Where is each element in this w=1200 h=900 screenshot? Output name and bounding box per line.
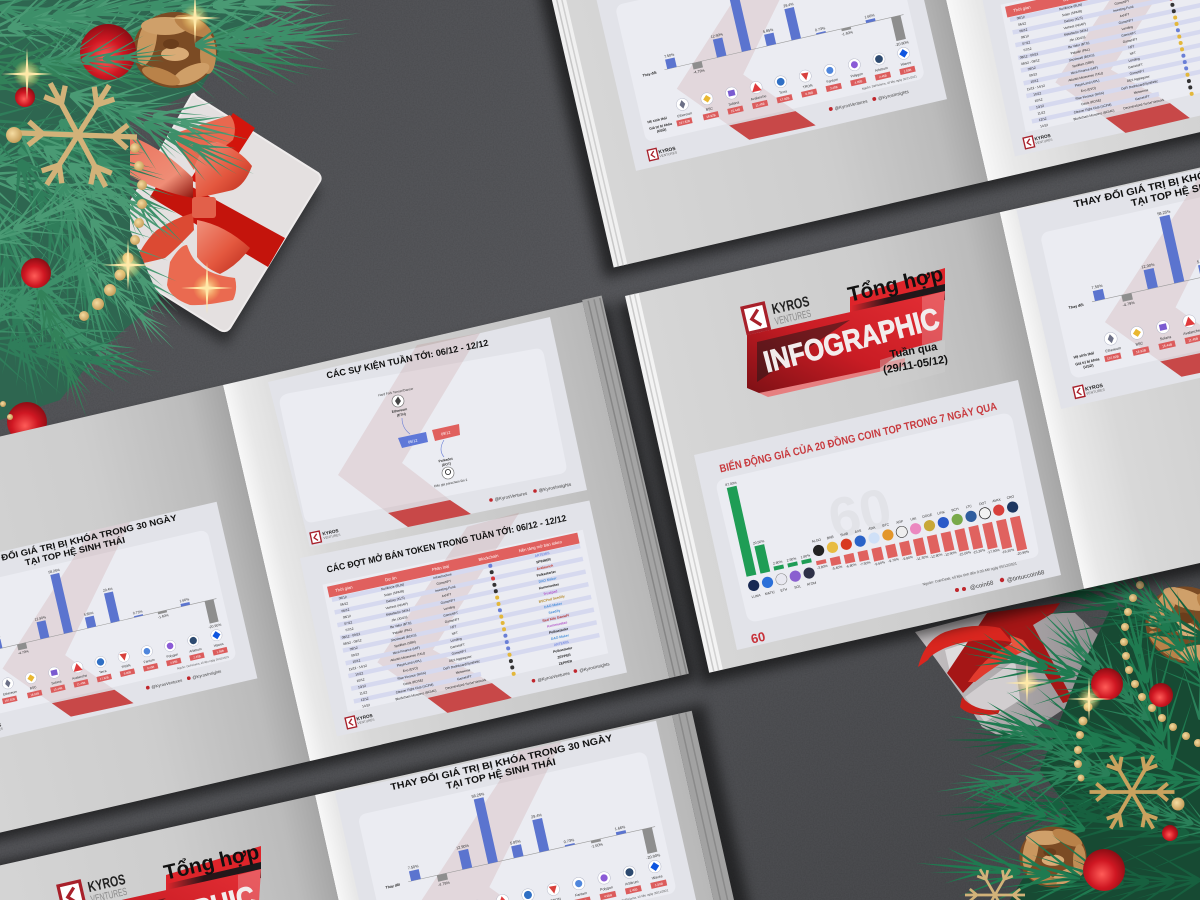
pine branch bottom-right — [912, 523, 1200, 900]
column: dates: 06/12 — [341, 608, 350, 613]
table header: Nền tảng mở bán token — [518, 539, 563, 553]
ecosystem icons — [419, 859, 662, 900]
Kyros logo: KYROS — [770, 294, 811, 318]
gold beads — [1074, 581, 1200, 810]
coin names: MATIC — [764, 590, 776, 596]
footer handles — [531, 661, 611, 684]
coin names: ALGO — [811, 538, 822, 544]
column: categories: Metaverse — [455, 668, 471, 675]
red ribbon decoration — [428, 680, 512, 716]
column: projects: PlayerLand (APL) — [396, 659, 422, 668]
bar values: 12.90% — [456, 844, 470, 850]
bar values: -15.30% — [972, 548, 986, 555]
column: categories: NFT — [451, 631, 458, 636]
bar values: -17.00% — [987, 548, 1000, 555]
gold snowflake — [17, 82, 139, 188]
coin names: UNI — [910, 516, 917, 522]
column: platforms: DAO Maker — [544, 601, 563, 609]
coin icons — [743, 500, 1024, 592]
bar values: 58.25% — [471, 792, 485, 799]
table header: Phân loại — [432, 564, 450, 572]
chart card on bottom book: 1.59B — [654, 882, 663, 887]
red ornaments — [1083, 668, 1178, 891]
column: projects: Rise Finance (RISA) — [397, 671, 426, 681]
column: projects: Galaxy (XLS) — [386, 596, 405, 604]
column: categories: NFT — [450, 624, 457, 630]
event: Ethereum: Ethereum — [391, 407, 408, 414]
column: projects: Solan (SPAIR) — [383, 589, 404, 597]
coin names: SOL — [794, 584, 802, 590]
column: categories: GameNFT — [450, 642, 465, 650]
footer logo: VENTURES — [323, 533, 341, 540]
bar values: -20.90% — [1016, 550, 1029, 556]
bars — [394, 762, 661, 900]
table card — [296, 492, 629, 739]
column: categories: GameNFT — [451, 649, 467, 656]
bar values: -3.80% — [817, 564, 828, 570]
column: platforms: Trustpad — [543, 589, 558, 596]
sparkles — [1005, 661, 1111, 721]
chevron decoration — [338, 333, 480, 513]
bar values: -7.50% — [860, 560, 871, 567]
chart card on bottom book — [335, 721, 699, 900]
column: platforms: ARTEMIS — [553, 640, 570, 647]
bar values: -9.60% — [874, 560, 885, 567]
period caption: Tuần qua — [889, 341, 939, 361]
column: categories: Lending — [443, 605, 455, 611]
period caption — [882, 341, 949, 377]
bar values: -4.79% — [438, 881, 451, 887]
column: categories: Decentralized Social Network — [445, 678, 487, 691]
heading: CÁC SỰ KIỆN TUẦN TỚI: 06/12 - 12/12 — [325, 337, 489, 380]
bar values: -11.30% — [916, 555, 929, 561]
event: Polkadot: (DOT) — [441, 462, 451, 467]
column: categories: DEX Aggregator — [449, 654, 473, 663]
pine branch top-left — [0, 0, 363, 442]
card background — [335, 721, 699, 900]
coin names: ATOM — [806, 581, 817, 587]
column: dates: 14/12 — [362, 703, 371, 709]
panel: price change of top 20 coins — [694, 380, 1061, 650]
table heading: CÁC ĐỢT MỞ BÁN TOKEN TRONG TUẦN TỚI: 06/12 - 12/12 — [325, 512, 567, 575]
gold beads — [0, 127, 147, 420]
coin names: ETH — [780, 587, 788, 593]
book right-centre: cover page with price chart — [615, 124, 1200, 685]
gift box bottom-right — [915, 603, 1117, 743]
footer logo: KYROS — [322, 528, 339, 536]
tag: 09/12 — [432, 424, 460, 441]
panel: upcoming events — [268, 317, 587, 547]
column: projects: Jiin (JGUS) — [391, 615, 408, 622]
column: categories: GameNFT — [457, 674, 472, 681]
gift box top-left — [95, 93, 321, 345]
column: projects: Blockchain Monsters (BCMC) — [395, 689, 437, 701]
column: platforms: DAO Maker — [551, 633, 570, 641]
bar values: -5.40% — [831, 565, 843, 571]
period caption: (29/11-05/12) — [882, 353, 949, 377]
chevron decoration — [394, 742, 600, 900]
column: projects: Paladin (PAL) — [392, 627, 412, 635]
banner title: INFOGRAPHIC — [760, 302, 943, 379]
bar values: 5.85% — [510, 839, 522, 846]
column: dates: 11/12 — [359, 690, 368, 696]
column: dates: 08/12 - 09/12 — [343, 638, 362, 646]
event: Polkadot — [434, 440, 468, 488]
ecosystem names: Polygon — [600, 885, 613, 892]
bar values: 1.80% — [800, 553, 811, 559]
coin names: BNB — [826, 535, 835, 540]
column: projects: Nunifiscie (BUN) — [381, 582, 405, 591]
bar values: 87.00% — [725, 481, 737, 487]
red ornaments — [7, 24, 136, 442]
red ribbon decoration — [388, 500, 471, 527]
bar values: -12.80% — [930, 553, 943, 559]
column: platforms: Avalaunch — [536, 564, 554, 571]
bar values: -6.80% — [845, 563, 857, 569]
header block: logo and banner — [742, 263, 945, 397]
column: dates: 12/12 — [360, 697, 369, 702]
losers bars — [816, 516, 1027, 594]
footer handles: @tintuccoin68 — [1007, 570, 1046, 584]
bar values: 20.50% — [753, 539, 765, 546]
chart title: THAY ĐỔI GIÁ TRỊ BỊ KHÓA TRONG 30 NGÀY — [389, 732, 614, 793]
tag: 09/12: 09/12 — [441, 431, 451, 436]
coin names: ADA — [868, 525, 876, 531]
bar values: -19.20% — [1001, 548, 1015, 554]
coin names: DOT — [979, 501, 987, 506]
column: dates: 10/12 — [352, 658, 361, 664]
footer handles: @KyrosVentures — [537, 670, 571, 683]
ecosystem names: Waves — [651, 874, 663, 880]
Kyros logo — [742, 293, 814, 334]
event: Ethereum — [378, 386, 415, 434]
event: Ethereum: (ETH) — [397, 412, 406, 418]
column: projects: Spellfam (SBR) — [394, 640, 416, 648]
column: categories: GameNFT — [443, 611, 458, 618]
table inner panel — [319, 525, 611, 713]
column: categories: Investing Fund — [435, 585, 456, 593]
column: dates: 10/12 — [356, 677, 365, 683]
coin names: LTC — [965, 504, 973, 509]
column: dates: 09/12 — [351, 652, 360, 658]
sparkles — [1, 0, 233, 314]
column: projects: Vorhest (ADAP) — [385, 602, 408, 610]
column: platforms: Polkastarter — [549, 627, 569, 635]
column: platforms: Red Kite GameFi — [542, 613, 570, 623]
ecosystem names: Fantom — [575, 891, 587, 898]
event: Ethereum: Hard Fork Tencer/Dancer — [378, 386, 415, 397]
footer handles: @KyrosInsights — [579, 661, 611, 673]
bar values: 0.73% — [563, 838, 575, 844]
column: dates: 07/12 — [345, 627, 354, 632]
banner — [747, 268, 945, 397]
chart card on centre-left book — [0, 502, 257, 746]
heading: Tổng hợp — [846, 263, 945, 307]
column: projects: Shoshwell (BCKS) — [390, 633, 417, 642]
column: dates: 11/12 - 14/12 — [348, 664, 368, 672]
column: projects: Bo Valor (BTG) — [390, 621, 412, 629]
column: dates: 06/12 — [343, 614, 351, 620]
column: projects: Metafactor (MSL) — [386, 608, 411, 617]
bar values: -20.90% — [646, 853, 661, 860]
column: dates: 07/12 — [344, 620, 353, 626]
table header: Dự án — [385, 575, 398, 582]
footer logo — [310, 527, 341, 544]
tag: 06/12 — [398, 432, 428, 448]
column: projects: Evo (EVO) — [403, 666, 418, 673]
coin names: CRO — [1006, 494, 1015, 500]
column: categories: GameNFT — [440, 598, 456, 605]
book bottom: cover page and chart page — [0, 704, 792, 900]
column: platforms: Polkastarter — [536, 569, 557, 578]
table header: Thời gian — [335, 584, 354, 593]
panel: token sale table — [296, 492, 629, 739]
bar values: 7.50% — [407, 864, 419, 870]
header on bottom book — [58, 841, 261, 900]
coin names: LINK — [937, 510, 946, 516]
coin names: AXS — [854, 529, 862, 534]
column: categories: GameNFT — [444, 617, 460, 624]
chart card on bottom book: TẠI TOP HỆ SINH THÁI — [445, 756, 557, 792]
panel heading: BIẾN ĐỘNG GIÁ CỦA 20 ĐỒNG COIN TOP TRONG 7 NGÀY QUA — [718, 400, 998, 475]
footer handles: @KyrosInsights — [538, 482, 572, 493]
Kyros logo: VENTURES — [774, 308, 812, 328]
tag: 06/12: 06/12 — [408, 439, 418, 444]
column: projects: Atlantis Metaverse (TAU) — [390, 651, 425, 663]
column: platforms: DAO Maker — [538, 576, 558, 584]
watermark: 60 — [822, 475, 897, 551]
pine cone lower — [1019, 825, 1087, 889]
coin names: BCH — [951, 507, 959, 512]
chart card on bottom book: 2.45B — [629, 887, 638, 893]
inner panel — [357, 751, 677, 900]
token table on top book — [974, 0, 1200, 159]
column: platforms: ARTEMIS — [534, 551, 551, 558]
coin names: AVAX — [992, 497, 1002, 503]
chevron decoration — [352, 513, 555, 707]
footer handles: @coin68 — [970, 580, 995, 592]
bar values: -12.90% — [944, 550, 957, 557]
chart card on bottom book: 4.95B — [604, 893, 612, 899]
column: categories: AxNFT — [441, 592, 452, 598]
footer handles — [955, 570, 1046, 592]
column: dates: 06/12 — [338, 595, 347, 600]
footer logo — [345, 712, 375, 729]
coin names: DOGE — [922, 513, 933, 519]
column: platforms: ZEPPER — [557, 653, 572, 660]
row labels: Thay đổi — [385, 883, 400, 890]
column: dates: 10/12 — [358, 684, 366, 689]
column: blockchain icons — [488, 563, 516, 676]
column: dates: 10/12 — [355, 671, 364, 677]
column: dates: 06/12 — [340, 601, 349, 607]
column: projects: Mirai Finance (MIF) — [392, 646, 420, 655]
column: categories: DeFi Dashboard/Synthetic — [443, 659, 481, 671]
column: projects: Oasis (ROSE) — [403, 678, 423, 686]
bar values: 2.80% — [773, 560, 783, 566]
footer handles: @KyrosVentures — [494, 491, 528, 502]
column: projects: Cleaver Fight Club (SCFM) — [395, 683, 434, 695]
bar values: 29.4% — [531, 813, 543, 819]
gainers bars — [727, 473, 812, 577]
column: platforms: BSCPad Seedify — [538, 594, 565, 604]
column: platforms: SPINNER — [536, 557, 552, 564]
coin names: BTC — [882, 522, 890, 528]
needles over ornament — [38, 25, 178, 91]
column: platforms: Polkastarter — [553, 646, 573, 654]
footer handles — [489, 482, 572, 502]
bar values: -9.80% — [902, 555, 913, 561]
book centre-left: chart page and events/token page — [0, 294, 697, 854]
column: dates: 09/12 — [349, 646, 358, 651]
column: dates: 08/12 - 09/12 — [341, 632, 361, 640]
coin68 logo: 60 — [749, 629, 767, 647]
column: categories: Infrastructure — [433, 572, 452, 580]
ecosystem names: Arbitrum — [625, 880, 639, 886]
event: Polkadot: Đấu giá parachain lần 2 — [434, 478, 468, 488]
pine cone — [133, 10, 217, 90]
bar values: 2.50% — [786, 557, 797, 563]
column: platforms: Seedify — [548, 609, 561, 615]
gold snowflakes — [965, 755, 1174, 900]
column: categories: Lending — [450, 636, 462, 643]
source note: Nguồn: CoinDesk, số liệu tính đến 9:30 AM ngày 05/12/2021 — [922, 562, 1017, 587]
book top: left page chart, right page token table — [516, 0, 1200, 278]
column: platforms: ZEPPER — [558, 659, 573, 666]
column: platforms: Kommunitas — [547, 620, 568, 629]
chart card on right-centre book right page — [1017, 136, 1200, 409]
coin names: SHIB — [840, 532, 849, 537]
coin names: LUNA — [751, 593, 762, 599]
footer logo: KYROS — [356, 713, 373, 721]
footer logo: VENTURES — [357, 718, 375, 725]
event: Polkadot: Polkadot — [438, 457, 454, 463]
bar values: 1.66% — [614, 825, 626, 831]
coin names: XRP — [896, 519, 904, 525]
table stripes — [331, 544, 603, 704]
bar values: -9.70% — [888, 557, 899, 563]
chart card on top book — [593, 0, 947, 171]
column: platforms: Kommunitas — [539, 582, 560, 590]
bar values: -1.60% — [591, 842, 604, 849]
bar values: -15.00% — [958, 550, 971, 557]
column: categories: GameNFT — [436, 579, 452, 586]
table header: Blockchain — [478, 553, 500, 562]
table header — [327, 533, 580, 598]
value pills — [420, 879, 667, 900]
